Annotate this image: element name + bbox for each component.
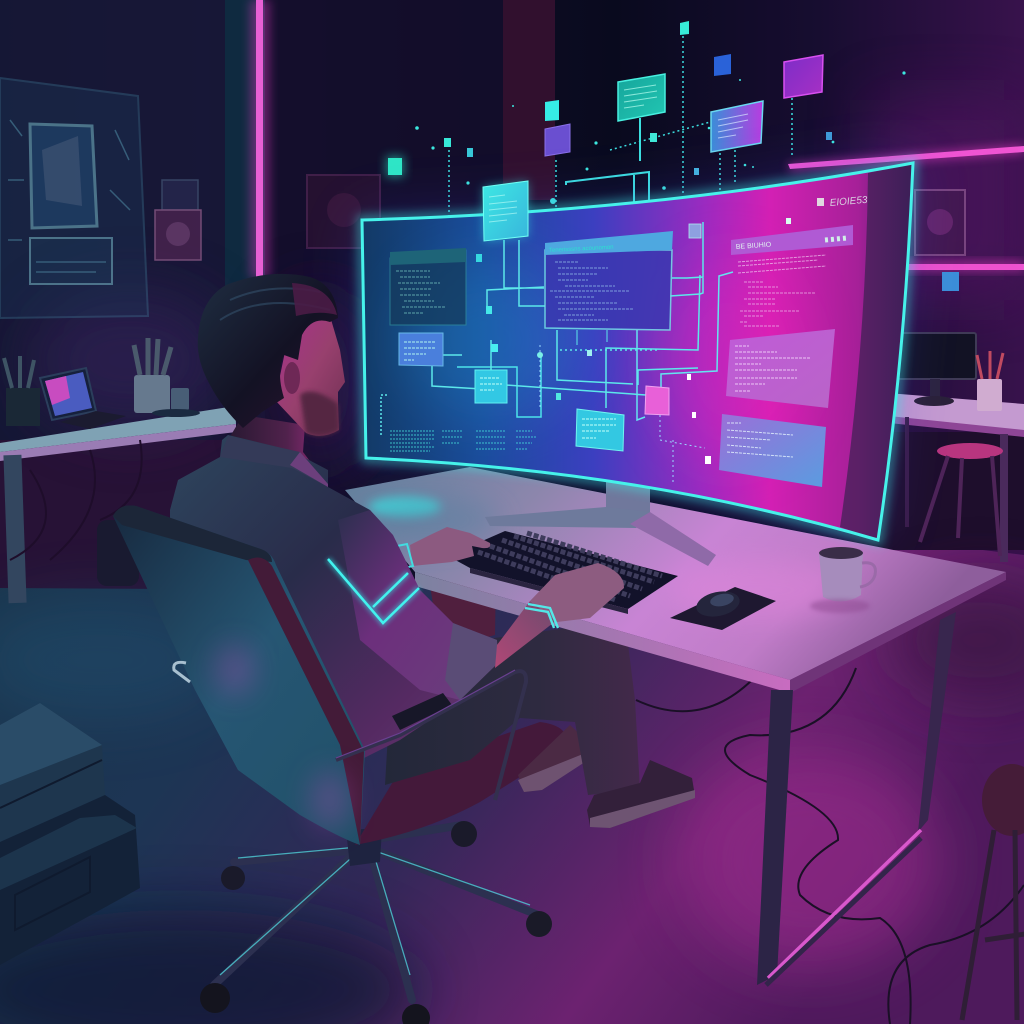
teal note card [618,74,665,121]
pen holder on left desk [134,338,200,417]
main desk [345,467,1006,985]
desk legs and frame [757,612,956,985]
main code window [545,231,673,330]
circuit connectors [381,222,733,485]
right sleeve [338,510,470,700]
brand label on screen: EIOIE53 [829,195,868,209]
thigh and shin [385,620,640,795]
monitor back glow [362,163,913,540]
stacked equipment boxes [0,703,140,965]
cyan lower node [576,409,624,451]
curved holographic monitor [362,163,913,566]
far shoe [518,725,588,792]
gradient note card [711,101,763,152]
laptop on left desk [40,368,126,429]
cyan screen node [475,370,507,403]
monitor glow border [362,163,913,540]
left background desk [0,338,236,603]
person sleeve and arms [328,510,624,700]
main code window: Tenerisssns acounomon [549,245,614,254]
pink screen node [645,386,669,415]
right foreground stool [962,764,1024,1020]
tiny screen nodes [476,218,791,464]
background monitor [898,333,976,406]
documentation panel header: BE BIUHIO [736,242,772,251]
screen surface [362,163,913,540]
floor [0,432,1024,1024]
documentation panel header [731,225,853,255]
background stool [920,443,1003,556]
office chair seat [355,722,567,845]
near shoe [587,760,695,828]
mouse pad and mouse [670,587,776,630]
ear [284,362,300,394]
blue info panel [719,414,826,487]
right forearm and hand [495,563,624,668]
blue screen node [399,333,443,366]
floating node squares [386,21,832,177]
collar [220,436,328,487]
hair [198,274,338,428]
violet note card [545,124,570,156]
person torso and head [170,274,498,770]
backpack by left wall [97,520,139,586]
purple note card [784,55,823,98]
keyboard [448,531,678,614]
left hand on keyboard [397,527,490,568]
chair armrest [336,670,526,800]
neon sleeve stripe [328,559,419,623]
coffee mug [810,547,875,613]
log text block [390,431,536,451]
pink pen cup [977,351,1003,411]
dark code panel [390,248,466,325]
neck [225,415,328,485]
small framed wall pictures [155,175,965,260]
pink info panel [726,329,835,408]
shirt torso [170,435,498,770]
office chair back [113,505,365,845]
floating diagram above monitor [386,21,906,225]
dark pen holder far left [4,356,40,426]
documentation text lines [738,255,826,326]
connectors [449,36,792,225]
wall blueprint poster [0,78,148,318]
particles [415,71,906,204]
far thigh under desk [430,575,496,650]
right background desk [850,333,1024,562]
person legs and shoes [385,575,695,828]
sleeve cuff [445,623,498,700]
office chair base [200,821,552,1024]
head [198,274,345,436]
neon wall strip left [250,0,270,278]
floating cyan card on screen edge [483,181,528,241]
cables on floor [636,668,1024,1024]
neon wall strips right [788,145,1024,291]
monitor stand [485,478,716,566]
